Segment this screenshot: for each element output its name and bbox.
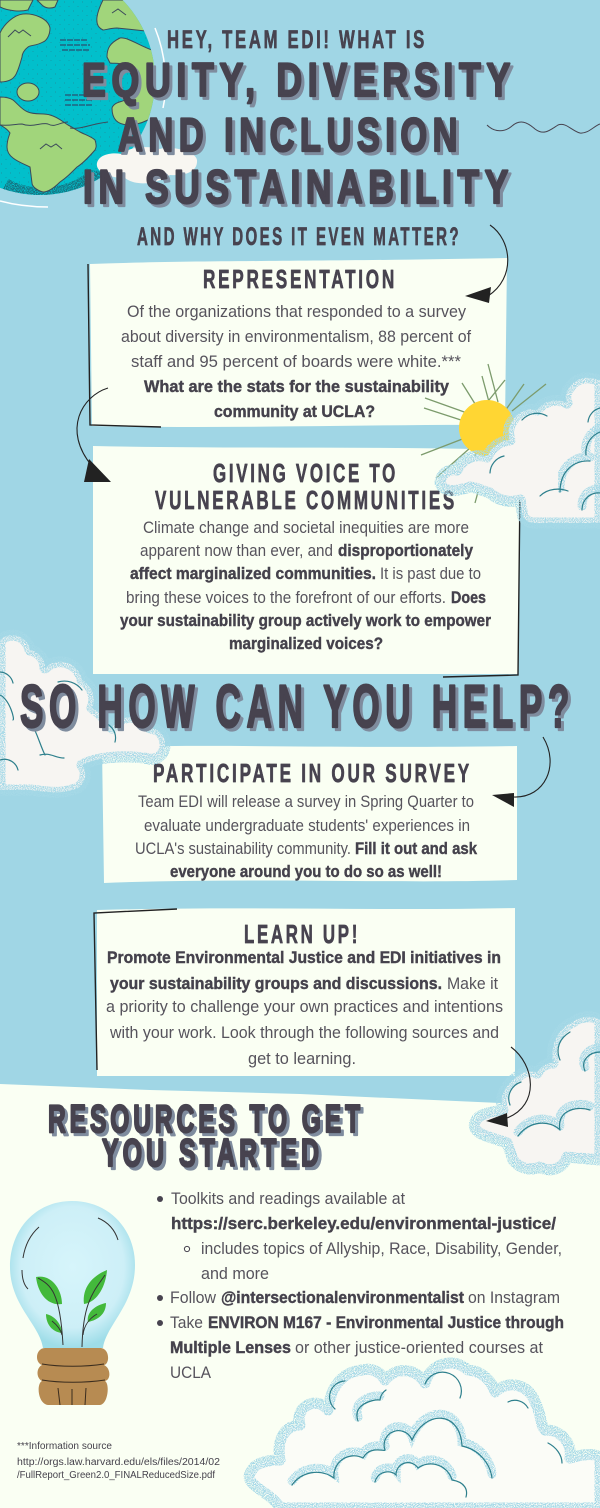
arrow: participate [492, 737, 550, 807]
text: giving voice body [120, 519, 492, 653]
text: learn up body: your sustainability groups and discussions. [110, 975, 442, 993]
text: learn up body: Promote Environmental Justice and EDI initiatives in [107, 949, 501, 967]
bullet list item: course: or other justice-oriented courses at [295, 1339, 543, 1357]
wave line [487, 122, 600, 133]
bullet list item: follow: on Instagram [468, 1289, 560, 1307]
text: giving voice body: affect marginalized communities. [130, 565, 376, 583]
background: blue upper area [0, 0, 600, 1110]
arrow: lower right [486, 1047, 530, 1127]
bullet list item: toolkits: https://serc.berkeley.edu/environmental-justice/ [171, 1215, 556, 1233]
panel: learn up [94, 908, 515, 1076]
heading: resources [48, 1098, 367, 1178]
text: representation body: staff and 95 percent of boards were white.*** [131, 353, 462, 371]
bullet list item: follow: Follow [170, 1289, 216, 1307]
bullet list item: follow: @intersectionalenvironmentalist [221, 1289, 464, 1307]
bullet list item: toolkits [157, 1190, 556, 1233]
icon: small white cloud [97, 147, 197, 183]
bullet list item: course: UCLA [170, 1364, 211, 1382]
text: participate body: evaluate undergraduate students' experiences in [144, 817, 470, 835]
text: learn up body: with your work. Look through the following sources and [109, 1024, 499, 1042]
text: giving voice body: Does [451, 589, 486, 607]
heading: giving voice [155, 458, 457, 515]
text: representation body [121, 303, 471, 421]
footnote: information source: http://orgs.law.harvard.edu/els/files/2014/02 [17, 1457, 220, 1468]
title: AND INCLUSION [121, 111, 466, 164]
icon: light bulb with plant [10, 1201, 135, 1405]
heading: giving voice: GIVING VOICE TO [213, 458, 398, 488]
text: participate body: everyone around you to do so as well! [170, 863, 442, 881]
decorative ring around earth [0, 28, 166, 207]
text: participate body: Fill it out and ask [355, 840, 478, 858]
title: HEY, TEAM EDI! WHAT IS [167, 26, 427, 54]
bullet list item: course [157, 1314, 564, 1382]
icon: cloud lower right [474, 1017, 600, 1170]
text: participate body: Team EDI will release a survey in Spring Quarter to [138, 793, 474, 811]
bullet list item: toolkits: Toolkits and readings available at [171, 1190, 405, 1208]
text: participate body: UCLA's sustainability community. [135, 840, 351, 858]
text: representation body: about diversity in environmentalism, 88 percent of [121, 328, 471, 346]
footnote: information source: /FullReport_Green2.0_FINALReducedSize.pdf [17, 1470, 215, 1481]
text: representation body: Of the organizations that responded to a survey [127, 303, 467, 321]
heading: resources: RESOURCES TO GET [48, 1098, 364, 1141]
icon: cloud left [0, 635, 165, 792]
heading: resources: YOU STARTED [105, 1135, 326, 1178]
heading: resources: YOU STARTED [102, 1132, 323, 1175]
icon: earth globe [0, 0, 165, 195]
footnote: information source [17, 1441, 220, 1481]
bullet list item: course: Take [170, 1314, 203, 1332]
icon: cloud upper right [440, 378, 600, 523]
title [82, 26, 519, 216]
icon: sun [421, 364, 546, 503]
sub-bullet: topics [184, 1240, 562, 1283]
text: representation body: community at UCLA? [214, 403, 375, 421]
text: giving voice body: It is past due to [380, 565, 481, 583]
icon: cloud bottom [249, 1363, 600, 1508]
text: learn up body: get to learning. [248, 1050, 356, 1068]
text: participate body [135, 793, 478, 881]
text: giving voice body: bring these voices to the forefront of our efforts. [126, 589, 446, 607]
text: giving voice body: your sustainability group actively work to empower [120, 612, 492, 630]
heading: resources: RESOURCES TO GET [51, 1101, 367, 1144]
bullet list item: follow [157, 1289, 560, 1307]
text: learn up body: a priority to challenge your own practices and intentions [106, 998, 503, 1016]
footnote: information source: ***Information source [17, 1441, 112, 1452]
arrow: top right [465, 225, 508, 303]
sub-bullet: topics: and more [201, 1265, 269, 1283]
heading: learn up: LEARN UP! [244, 919, 360, 949]
heading: representation: REPRESENTATION [203, 264, 397, 294]
arrow: left [77, 388, 111, 482]
text: representation body: What are the stats for the sustainability [144, 378, 450, 396]
panel: participate [102, 746, 517, 883]
bullet list item: course: ENVIRON M167 - Environmental Justice through [208, 1314, 564, 1332]
text: giving voice body: marginalized voices? [229, 635, 383, 653]
text: giving voice body: apparent now than ever, and [140, 542, 333, 560]
bullet list item: course: Multiple Lenses [170, 1339, 291, 1357]
text: learn up body: Make it [447, 975, 498, 993]
text: giving voice body: disproportionately [338, 542, 474, 560]
text: giving voice body: Climate change and societal inequities are more [143, 519, 469, 537]
panel: representation [88, 258, 507, 427]
sub-bullet: topics: includes topics of Allyship, Race, Disability, Gender, [201, 1240, 562, 1258]
panel: giving voice [93, 446, 520, 677]
text: learn up body [106, 949, 503, 1068]
resources list [157, 1190, 564, 1382]
title: AND INCLUSION [118, 108, 463, 161]
